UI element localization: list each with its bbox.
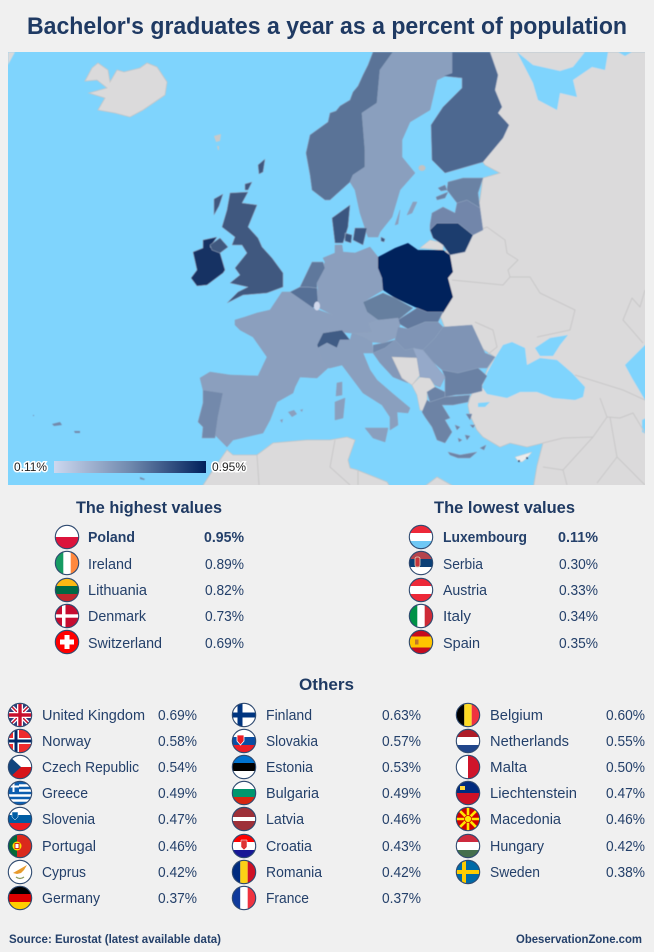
Aland islands (418, 165, 426, 171)
country: United Kingdom (222, 192, 283, 303)
Kaliningrad (420, 240, 443, 250)
title: Bachelor's graduates a year as a percent of population (27, 13, 627, 40)
row: Latvia: 0.46% (382, 812, 421, 828)
colour scale legend: 0.95% (212, 462, 246, 474)
country: Greece (422, 395, 470, 443)
row: Poland: 0.95% (204, 530, 244, 546)
Balearic islands (280, 409, 303, 423)
row: Serbia (409, 551, 598, 575)
row: Sweden (456, 860, 645, 884)
panel: the highest values (55, 499, 244, 654)
land: Black Sea (482, 342, 585, 400)
country: Luxembourg (314, 302, 320, 310)
row: Austria: 0.33% (559, 583, 598, 599)
row: Czech Republic (8, 755, 197, 779)
country: Norway (306, 52, 393, 200)
country: France (235, 292, 333, 387)
row: Macedonia (456, 807, 645, 831)
row: Norway (8, 729, 197, 753)
colour scale legend (14, 461, 246, 474)
row: Liechtenstein (456, 781, 645, 805)
row: Netherlands (456, 729, 645, 753)
row: Hungary: Hungary (490, 839, 545, 855)
land: Russia, Ukraine, Turkey and neighbours (440, 52, 650, 490)
row: Switzerland: Switzerland (88, 636, 162, 652)
country: Sardinia (Italy) (335, 398, 345, 420)
row: Slovakia: Slovakia (266, 734, 319, 750)
land: Sea of Marmara (478, 402, 490, 407)
row: Romania: 0.42% (382, 865, 421, 881)
row: Serbia: Serbia (443, 557, 484, 573)
land: White Sea (517, 52, 632, 110)
row: Serbia: 0.30% (559, 557, 598, 573)
site credit: ObeservationZone.com (516, 934, 642, 946)
row: Slovakia: 0.57% (382, 734, 421, 750)
Faroe Islands (214, 134, 221, 150)
country: Romania (423, 325, 495, 373)
row: Malta: 0.50% (606, 760, 645, 776)
country: Ireland (191, 237, 225, 286)
Africa (200, 437, 460, 490)
country: Netherlands (300, 262, 325, 288)
row: United Kingdom: United Kingdom (42, 708, 145, 724)
row: Luxembourg: 0.11% (558, 530, 598, 546)
country: Germany (317, 245, 383, 333)
row: Switzerland (55, 630, 244, 654)
row: Sweden: Sweden (490, 865, 540, 881)
country: Crete and Greek islands (448, 414, 486, 458)
row: France (232, 886, 421, 910)
row: Slovenia: 0.47% (158, 812, 197, 828)
row: Spain: Spain (443, 636, 480, 652)
row: Norway: 0.58% (158, 734, 197, 750)
row: Czech Republic: 0.54% (158, 760, 197, 776)
row: Estonia: Estonia (266, 760, 314, 776)
row: Lithuania: Lithuania (88, 583, 148, 599)
country: Sicily (Italy) (365, 428, 388, 442)
country: Corsica (France) (336, 382, 342, 396)
country: Belgium (290, 287, 318, 308)
row: France: 0.37% (382, 891, 421, 907)
row: Switzerland: 0.69% (205, 636, 244, 652)
country: Latvia (430, 200, 483, 235)
row: Liechtenstein: 0.47% (606, 786, 645, 802)
country: Finland (431, 52, 509, 173)
row: Slovenia (8, 807, 197, 831)
row: Macedonia: 0.46% (606, 812, 645, 828)
row: Belgium: Belgium (490, 708, 543, 724)
Greenland corner (8, 52, 15, 65)
country: Portugal (198, 390, 223, 438)
row: Cyprus: 0.42% (158, 865, 197, 881)
row: Greece: Greece (42, 786, 88, 802)
row: France: France (266, 891, 309, 907)
map of Europe (8, 52, 650, 490)
country: Denmark (332, 205, 385, 245)
row: Greece: 0.49% (158, 786, 197, 802)
row: Ireland: Ireland (88, 557, 132, 573)
country: Switzerland (317, 330, 350, 348)
country: Slovakia (398, 308, 443, 329)
row: Netherlands: 0.55% (606, 734, 645, 750)
row: Croatia (232, 834, 421, 858)
heading: others: Others (299, 676, 354, 694)
row: Romania (232, 860, 421, 884)
row: Lithuania (55, 578, 244, 602)
borders of eastern countries (452, 227, 645, 485)
row: Denmark: 0.73% (205, 609, 244, 625)
borders of north African countries (257, 440, 358, 485)
row: Spain (409, 630, 598, 654)
row: Hungary: 0.42% (606, 839, 645, 855)
country: Sweden (350, 52, 452, 237)
row: Ireland (55, 551, 244, 575)
country: Estonia (436, 178, 483, 208)
row: Romania: Romania (266, 865, 323, 881)
country: Macedonia (427, 387, 445, 402)
row: Greece (8, 781, 197, 805)
row: Ireland: 0.89% (205, 557, 244, 573)
row: Netherlands: Netherlands (490, 734, 569, 750)
row: Liechtenstein: Liechtenstein (490, 786, 577, 802)
row: Italy: Italy (443, 609, 472, 625)
row: Slovenia: Slovenia (42, 812, 96, 828)
row: Cyprus: Cyprus (42, 865, 86, 881)
row: Poland: Poland (88, 530, 135, 546)
row: Latvia: Latvia (266, 812, 305, 828)
row: Macedonia: Macedonia (490, 812, 562, 828)
country: Northern Ireland (UK) (210, 238, 228, 253)
row: Lithuania: 0.82% (205, 583, 244, 599)
country: Italy (318, 333, 410, 430)
country: Austria (352, 318, 400, 343)
panel: the lowest values (409, 499, 598, 654)
row: Estonia: 0.53% (382, 760, 421, 776)
country: Lithuania (430, 223, 473, 255)
row: Luxembourg: Luxembourg (443, 530, 527, 546)
country: Spain (200, 372, 295, 447)
row: Portugal: Portugal (42, 839, 96, 855)
colour scale legend: 0.11% (14, 462, 47, 474)
land: Caspian Sea (624, 344, 645, 434)
source note: Source: Eurostat (latest available data) (9, 934, 221, 946)
row: Slovakia (232, 729, 421, 753)
row: Croatia: Croatia (266, 839, 313, 855)
heading: the highest values: The highest values (76, 499, 222, 517)
row: Norway: Norway (42, 734, 92, 750)
row: Croatia: 0.43% (382, 839, 421, 855)
heading: the lowest values: The lowest values (434, 499, 575, 517)
row: Finland: Finland (266, 708, 312, 724)
row: Spain: 0.35% (559, 636, 598, 652)
row: Germany (8, 886, 197, 910)
Azores and Madeira (33, 415, 145, 480)
row: United Kingdom: 0.69% (158, 708, 197, 724)
row: Belgium: 0.60% (606, 708, 645, 724)
row: Estonia (232, 755, 421, 779)
country: Czech Republic (363, 293, 413, 320)
country: Gotland and Oland (Sweden) (395, 202, 417, 225)
panel: others (8, 676, 645, 910)
row: Luxembourg (409, 525, 598, 549)
country: Poland (378, 243, 453, 313)
row: Bulgaria (232, 781, 421, 805)
country: Cyprus (515, 452, 532, 462)
row: Malta (456, 755, 645, 779)
row: Bulgaria: Bulgaria (266, 786, 320, 802)
land: Sea of Azov (535, 335, 568, 356)
row: Sweden: 0.38% (606, 865, 645, 881)
row: Malta: Malta (490, 760, 528, 776)
row: Austria (409, 578, 598, 602)
row: Bulgaria: 0.49% (382, 786, 421, 802)
row: Italy: 0.34% (559, 609, 598, 625)
row: Latvia (232, 807, 421, 831)
country: UK islands (Hebrides, Orkney, Shetland) (214, 159, 265, 215)
country: Hungary (395, 322, 443, 350)
row: Germany: 0.37% (158, 891, 197, 907)
row: Poland (55, 525, 244, 549)
Cyprus dark spots (518, 457, 528, 462)
row: Hungary (456, 834, 645, 858)
row: Italy (409, 604, 598, 628)
country: Croatia (373, 340, 417, 383)
row: Austria: Austria (443, 583, 488, 599)
row: Denmark: Denmark (88, 609, 147, 625)
row: United Kingdom (8, 703, 197, 727)
row: Finland (232, 703, 421, 727)
country: Slovenia (373, 340, 395, 353)
row: Finland: 0.63% (382, 708, 421, 724)
country: Serbia (413, 348, 445, 387)
row: Germany: Germany (42, 891, 101, 907)
Iceland (85, 63, 167, 117)
row: Portugal (8, 834, 197, 858)
country: Montenegro, Kosovo, Albania (no data) (412, 377, 435, 412)
row: Czech Republic: Czech Republic (42, 760, 139, 776)
row: Portugal: 0.46% (158, 839, 197, 855)
country: Bulgaria (442, 368, 487, 397)
country: Bosnia (no data) (392, 357, 420, 385)
row: Cyprus (8, 860, 197, 884)
row: Belgium (456, 703, 645, 727)
row: Denmark (55, 604, 244, 628)
